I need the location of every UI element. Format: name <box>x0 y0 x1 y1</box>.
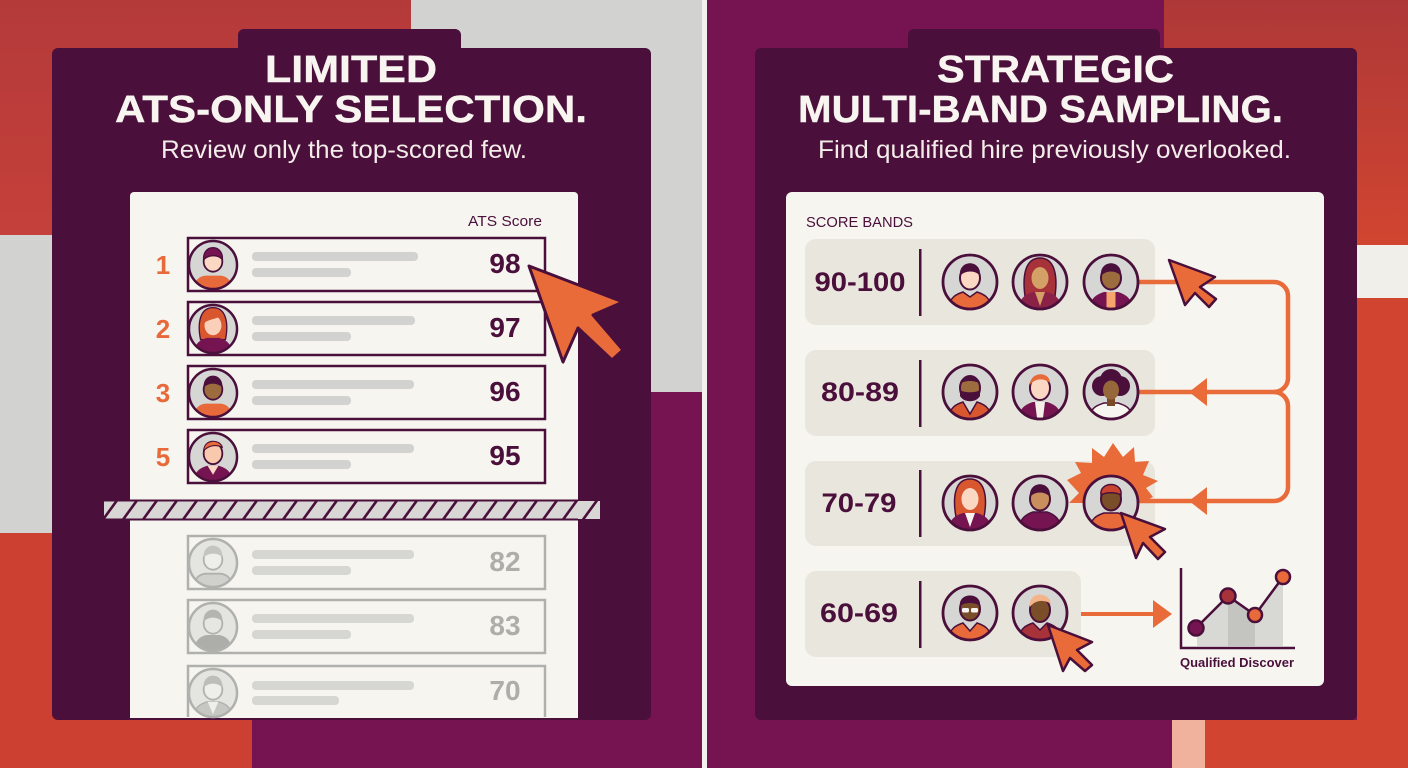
cut-off line: hatched barrier <box>104 500 600 520</box>
avatar: 80-89 person 1 <box>943 365 997 419</box>
row: rank 3, score 96 <box>156 366 545 419</box>
chart: qualified discover line chart <box>1180 568 1295 670</box>
row: greyed score 82: 82 <box>489 546 521 577</box>
row: greyed score 83: 83 <box>489 610 521 641</box>
avatar: 60-69 person 1 <box>943 586 997 640</box>
avatar: 80-89 person 3 <box>1084 365 1138 419</box>
card: ranked list <box>130 192 578 718</box>
band: 60-69: 60-69 <box>820 598 898 628</box>
card: score bands <box>786 192 1324 686</box>
heading: strategic multi-band sampling: MULTI-BAND SAMPLING. <box>798 89 1283 131</box>
row: rank 5, score 95: 5 <box>156 442 170 472</box>
panel: limited ATS-only selection <box>52 29 651 720</box>
row: greyed score 83 <box>188 600 545 653</box>
row: rank 3, score 96: 3 <box>156 378 170 408</box>
arrow: 60-69 band to chart <box>1081 600 1172 628</box>
band: 90-100: 90-100 <box>814 267 906 297</box>
background: right half colour blocks <box>707 0 1408 768</box>
avatar: 90-100 person 3 <box>1084 255 1138 309</box>
subheading: Find qualified hire previously overlooked. <box>818 136 1291 164</box>
heading: strategic multi-band sampling <box>798 49 1283 131</box>
avatar: 70-79 person 2 <box>1013 476 1067 530</box>
row: rank 5, score 95: 95 <box>489 440 521 471</box>
chart caption: Qualified Discover <box>1180 655 1294 670</box>
icon: cursor on 70-79 person <box>1121 513 1165 559</box>
avatar: 90-100 person 1 <box>943 255 997 309</box>
label: score bands: SCORE BANDS <box>806 214 913 231</box>
band: 80-89 <box>805 350 1155 436</box>
avatar: 70-79 person 1 <box>943 476 997 530</box>
band: 90-100 <box>805 239 1155 325</box>
icon: large cursor pointing at top score <box>529 266 623 362</box>
avatar: 80-89 person 2 <box>1013 365 1067 419</box>
icon: cursor at top band <box>1169 260 1216 307</box>
row: greyed score 70 <box>188 666 545 717</box>
row: rank 5, score 95 <box>156 430 545 483</box>
band: 80-89: 80-89 <box>821 377 899 407</box>
band: 60-69 <box>805 571 1081 657</box>
heading: limited ATS-only selection: ATS-ONLY SELECTION. <box>115 89 587 131</box>
row: greyed score 82 <box>188 536 545 589</box>
divider between panels <box>702 0 707 768</box>
row: rank 3, score 96: 96 <box>489 376 521 407</box>
icon: starburst highlight <box>1067 443 1158 503</box>
row: rank 2, score 97 <box>156 302 545 355</box>
connector: orange arrows linking bands <box>1138 282 1288 515</box>
avatar: 90-100 person 2 <box>1013 255 1067 309</box>
heading: strategic multi-band sampling: STRATEGIC <box>937 49 1174 91</box>
row: greyed score 70: 70 <box>489 675 521 706</box>
icon: cursor on 60-69 person <box>1048 625 1092 671</box>
column label: ATS Score: ATS Score <box>468 213 542 230</box>
heading: limited ATS-only selection: LIMITED <box>265 49 437 91</box>
row: rank 1, score 98: 98 <box>489 248 521 279</box>
heading: limited ATS-only selection <box>115 49 587 131</box>
band: 70-79: 70-79 <box>822 488 896 518</box>
row: rank 1, score 98: 1 <box>156 250 170 280</box>
row: rank 2, score 97: 2 <box>156 314 170 344</box>
band: 70-79 <box>805 461 1155 546</box>
avatar: 60-69 person 2 <box>1013 586 1067 640</box>
subheading: Review only the top-scored few. <box>161 136 527 164</box>
row: rank 2, score 97: 97 <box>489 312 521 343</box>
panel: strategic multi-band sampling <box>755 29 1357 720</box>
avatar: 70-79 highlighted person <box>1084 476 1138 530</box>
background: left half colour blocks <box>0 0 702 768</box>
row: rank 1, score 98 <box>156 238 545 291</box>
